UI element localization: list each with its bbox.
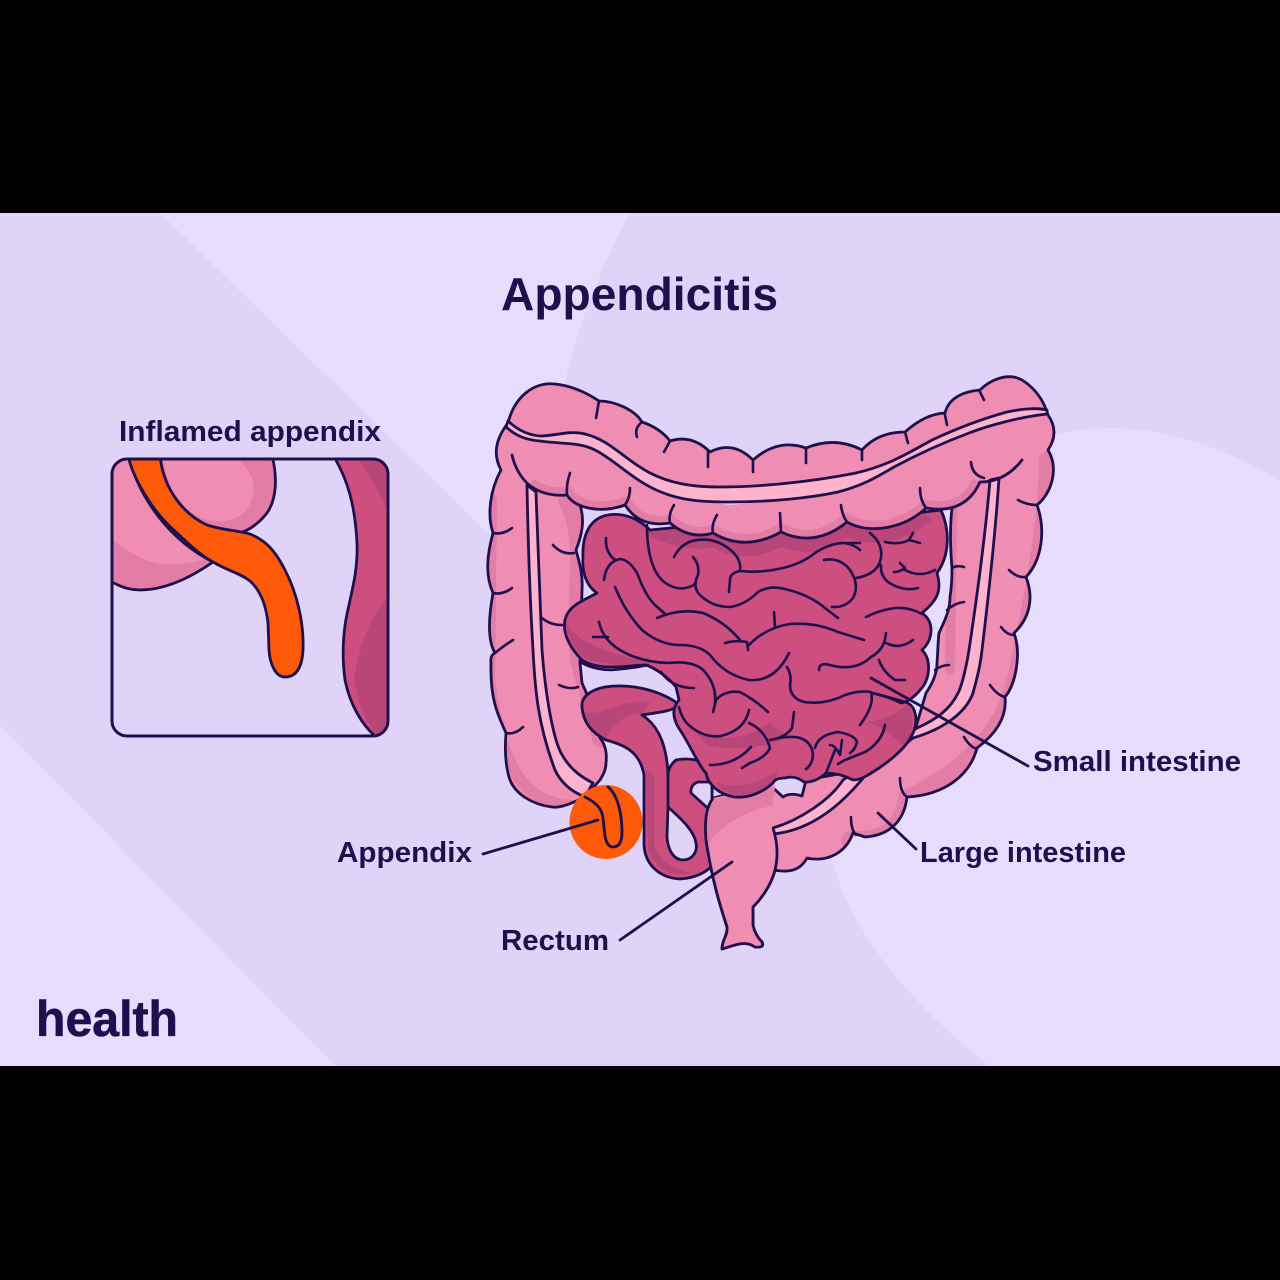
top lobe of large intestine [162,460,277,532]
panel: inflamed appendix inset [105,455,395,738]
label: appendix: Appendix [337,837,472,869]
inset heading: inflamed appendix: Inflamed appendix [119,416,381,448]
left lobe of large intestine [114,460,213,592]
label: large intestine: Large intestine [920,837,1126,869]
right strip of small intestine [334,460,386,734]
logo: health: health [36,991,178,1047]
ileum tube and lower loop of small intestine [582,686,712,879]
transverse band [506,409,1047,502]
small intestine fold lines [582,525,935,773]
label: rectum [501,862,732,957]
label: small intestine: Small intestine [1033,746,1241,778]
inflamed appendix tube [128,455,303,677]
title: Appendicitis [501,268,778,320]
large intestine [488,377,1054,949]
label: large intestine [878,813,1126,869]
colon fold ticks [493,500,1037,835]
ascending band [527,485,593,797]
descending band [773,478,999,834]
icon: orange inflammation circle with appendix [570,785,642,859]
label: appendix [337,820,598,869]
transverse fold ticks [567,390,984,533]
rectum [705,785,777,949]
background panel [0,213,1280,1066]
label: rectum: Rectum [501,925,609,957]
small intestine shading [566,514,926,795]
small intestine [564,510,947,797]
label: small intestine [871,678,1241,778]
colon shading [489,460,1048,840]
transverse colon overlapping the small intestine [506,390,1047,542]
